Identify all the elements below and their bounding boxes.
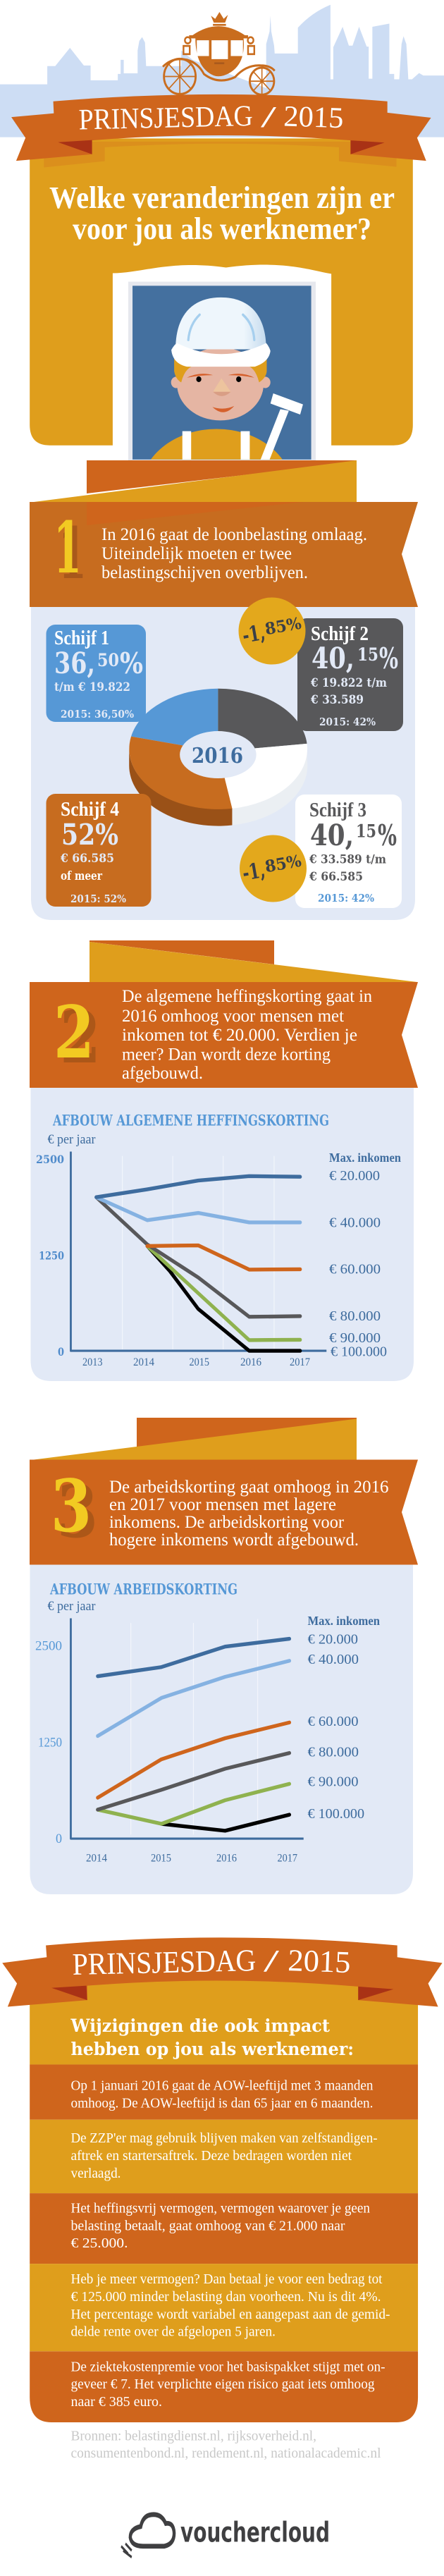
- section 3 text: en 2017 voor mensen met lagere: [109, 1495, 336, 1514]
- card: Schijf 2: %: [379, 642, 398, 675]
- section 2 fold: [90, 940, 417, 982]
- card: Schijf 1: 2015: 36,50%: [61, 708, 134, 720]
- y axis labels: 2500: [36, 1153, 64, 1166]
- section 2 text: meer? Dan wordt deze korting: [122, 1045, 331, 1065]
- change 5: naar € 385 euro.: [70, 2394, 162, 2410]
- skyline: [0, 5, 444, 137]
- x axis years: 2014: [133, 1356, 154, 1368]
- section 1 text: belastingschijven overblijven.: [101, 563, 308, 582]
- card: Schijf 4: [47, 794, 151, 907]
- chart title: AFBOUW ARBEIDSKORTING: [49, 1581, 238, 1597]
- section 3 text: inkomens. De arbeidskorting voor: [109, 1513, 345, 1532]
- change 5: [70, 2359, 385, 2410]
- change 2: verlaagd.: [70, 2166, 121, 2181]
- panel heading: hebben op jou als werknemer:: [70, 2039, 354, 2059]
- y axis labels: 2500: [35, 1638, 62, 1654]
- ribbon title: PRINSJESDAG: [78, 100, 253, 136]
- legend: € 60.000: [329, 1262, 381, 1277]
- ribbon title: 2015: [283, 101, 344, 135]
- card: Schijf 4: 2015: 52%: [70, 893, 126, 905]
- change 2: De ZZP'er mag gebruik blijven maken van zelfstandigen-: [70, 2130, 378, 2146]
- card: Schijf 1: Schijf 1: [54, 627, 109, 649]
- change 3: € 25.000.: [70, 2235, 128, 2251]
- section 1 fold: [34, 460, 357, 502]
- panel: other changes: [30, 1980, 418, 2422]
- y axis unit: € per jaar: [48, 1599, 96, 1614]
- number 3: 3: [57, 1470, 98, 1554]
- section 2 text: inkomen tot € 20.000. Verdien je: [122, 1026, 357, 1045]
- card: Schijf 2: 40,: [312, 642, 354, 675]
- legend: [329, 1151, 401, 1359]
- change 4: Heb je meer vermogen? Dan betaal je voor een bedrag tot: [70, 2271, 383, 2287]
- card: Schijf 1: t/m € 19.822: [54, 680, 130, 694]
- y axis labels: 1250: [38, 1736, 62, 1750]
- x axis years: 2015: [189, 1356, 209, 1368]
- section 3 text: [109, 1478, 389, 1550]
- card: Schijf 3: Schijf 3: [309, 799, 366, 821]
- number 1: [54, 506, 87, 595]
- carriage icon: [163, 12, 275, 94]
- x axis years: 2016: [216, 1853, 237, 1864]
- legend: Max. inkomen: [329, 1151, 401, 1165]
- card: Schijf 2: 15: [357, 644, 378, 665]
- y axis labels: 1250: [39, 1249, 64, 1262]
- card: Schijf 4: of meer: [61, 869, 103, 883]
- section 3 text: De arbeidskorting gaat omhoog in 2016: [109, 1478, 389, 1497]
- x axis years: 2014: [86, 1853, 107, 1864]
- y axis labels: [35, 1638, 62, 1846]
- chart: afbouw algemene heffingskorting: [36, 1111, 401, 1368]
- card: Schijf 3: € 33.589 t/m: [309, 853, 386, 867]
- legend: € 20.000: [307, 1631, 358, 1647]
- footer ribbon title: /: [264, 1944, 280, 1978]
- change 3: Het heffingsvrij vermogen, vermogen waarover je geen: [70, 2201, 370, 2216]
- footer ribbon: [2, 1937, 443, 2006]
- x axis years: [82, 1356, 310, 1368]
- number 2: 2: [54, 990, 94, 1075]
- legend: € 90.000: [329, 1330, 381, 1346]
- card: Schijf 2: € 19.822 t/m: [310, 676, 387, 690]
- panel heading: Wijzigingen die ook impact: [70, 2016, 330, 2036]
- badge: -1,85% bottom: -1,: [240, 858, 267, 886]
- worker portrait: [113, 265, 331, 460]
- legend: [307, 1614, 380, 1822]
- legend: € 40.000: [329, 1215, 381, 1231]
- main heading: Welke veranderingen zijn er: [49, 180, 395, 215]
- change 3: [70, 2201, 370, 2251]
- badge: -1,85% top: [238, 598, 306, 664]
- main heading: voor jou als werknemer?: [73, 211, 371, 246]
- change 4: [70, 2271, 390, 2339]
- section 1 text: Uiteindelijk moeten er twee: [101, 544, 292, 563]
- number 3: 3: [51, 1464, 92, 1549]
- panel: section 1 chart background: [31, 599, 415, 920]
- legend: Max. inkomen: [307, 1614, 380, 1628]
- x axis years: 2015: [151, 1853, 171, 1864]
- section 1 banner: [30, 502, 418, 607]
- x axis years: 2017: [290, 1356, 310, 1368]
- change 5: De ziektekostenpremie voor het basispakket stijgt met on-: [70, 2359, 385, 2374]
- legend: € 100.000: [307, 1806, 364, 1822]
- y axis unit: € per jaar: [48, 1132, 96, 1147]
- number 1: 1: [54, 506, 82, 589]
- legend: € 60.000: [307, 1714, 358, 1729]
- y axis labels: 0: [56, 1832, 62, 1846]
- section 2 text: 2016 omhoog voor mensen met: [122, 1007, 344, 1026]
- section 1 text: In 2016 gaat de loonbelasting omlaag.: [101, 525, 367, 544]
- y axis labels: 0: [58, 1345, 64, 1358]
- legend: € 40.000: [307, 1652, 359, 1667]
- footer ribbon title: 2015: [288, 1943, 351, 1980]
- section 2 banner: [30, 982, 418, 1088]
- y axis labels: [36, 1153, 64, 1358]
- ribbon title: /: [261, 102, 277, 134]
- legend: € 80.000: [329, 1308, 381, 1324]
- change 2: aftrek en startersaftrek. Deze bedragen worden niet: [70, 2148, 352, 2164]
- panel: section 2 chart background: [31, 1079, 414, 1381]
- legend: € 100.000: [331, 1344, 387, 1359]
- legend: € 80.000: [307, 1744, 359, 1760]
- x axis years: 2013: [82, 1356, 103, 1368]
- lines and axes: [70, 1619, 304, 1839]
- legend: € 90.000: [307, 1774, 358, 1789]
- lines and axes: [70, 1151, 326, 1351]
- card: Schijf 3: %: [378, 818, 397, 852]
- pie chart 2016: [129, 689, 307, 826]
- card: Schijf 4: € 66.585: [60, 852, 114, 866]
- panel heading: [70, 2016, 354, 2059]
- change 4: € 125.000 minder belasting dan voorheen. Nu is dit 4%.: [70, 2289, 381, 2305]
- legend: € 20.000: [329, 1168, 380, 1184]
- card: Schijf 1: %: [120, 646, 143, 680]
- section 3 fold: [34, 1418, 357, 1460]
- card: Schijf 3: 40,: [310, 818, 354, 852]
- card: Schijf 2: Schijf 2: [311, 623, 369, 645]
- badge: -1,85% bottom: 85%: [264, 852, 303, 876]
- x axis years: 2016: [240, 1356, 261, 1368]
- pie centre label: 2016: [192, 744, 243, 768]
- section 1 text: [101, 525, 367, 582]
- card: Schijf 1: 50: [97, 650, 119, 670]
- sources: Bronnen: belastingdienst.nl, rijksoverheid.nl,: [70, 2428, 316, 2443]
- change 2: [70, 2130, 378, 2181]
- card: Schijf 1: [47, 625, 146, 722]
- number 2: 2: [60, 995, 101, 1080]
- section 3 text: hogere inkomens wordt afgebouwd.: [109, 1531, 359, 1550]
- top ribbon: [11, 94, 431, 161]
- card: Schijf 2: 2015: 42%: [319, 716, 376, 728]
- badge: -1,85% top: -1,: [240, 620, 267, 649]
- sources: consumentenbond.nl, rendement.nl, nationalacademic.nl: [70, 2446, 381, 2461]
- section 2 text: De algemene heffingskorting gaat in: [122, 987, 372, 1006]
- change 1: Op 1 januari 2016 gaat de AOW-leeftijd met 3 maanden: [70, 2078, 374, 2094]
- panel: section 3 chart background: [30, 1558, 413, 1894]
- number 1: 1: [58, 512, 87, 595]
- change 4: Het percentage wordt variabel en aangepast aan de gemid-: [70, 2307, 390, 2322]
- change 1: [70, 2078, 374, 2111]
- icon: cloud: [121, 2515, 174, 2557]
- badge: -1,85% top: 85%: [264, 614, 303, 639]
- chart title: AFBOUW ALGEMENE HEFFINGSKORTING: [52, 1111, 329, 1129]
- card: Schijf 4: 52%: [61, 818, 118, 852]
- change 4: delde rente over de afgelopen 5 jaren.: [70, 2324, 276, 2339]
- vouchercloud logo: [121, 2515, 330, 2557]
- card: Schijf 2: [297, 618, 403, 731]
- section 2 text: [122, 987, 372, 1083]
- x axis years: [86, 1853, 297, 1864]
- card: Schijf 3: [295, 795, 402, 908]
- main yellow panel: [30, 138, 413, 446]
- main heading: [49, 180, 395, 246]
- x axis years: 2017: [278, 1853, 297, 1864]
- change 1: omhoog. De AOW-leeftijd is dan 65 jaar en 6 maanden.: [70, 2095, 374, 2111]
- footer ribbon title: PRINSJESDAG: [72, 1943, 257, 1982]
- card: Schijf 3: 2015: 42%: [318, 892, 374, 904]
- card: Schijf 4: Schijf 4: [61, 799, 119, 821]
- sources: [70, 2428, 381, 2461]
- card: Schijf 3: € 66.585: [309, 870, 363, 884]
- chart: afbouw arbeidskorting: [35, 1581, 380, 1864]
- change 3: belasting betaalt, gaat omhoog van € 21.000 naar: [70, 2218, 345, 2233]
- section 2 text: afgebouwd.: [122, 1064, 203, 1083]
- card: Schijf 3: 15: [356, 821, 376, 842]
- card: Schijf 1: 36,: [54, 646, 95, 680]
- change 5: geveer € 7. Het verplichte eigen risico gaat iets omhoog: [70, 2376, 375, 2392]
- logo wordmark: vouchercloud: [180, 2517, 330, 2549]
- card: Schijf 2: € 33.589: [310, 693, 364, 707]
- badge: -1,85% bottom: [240, 835, 307, 902]
- section 3 banner: [30, 1459, 418, 1565]
